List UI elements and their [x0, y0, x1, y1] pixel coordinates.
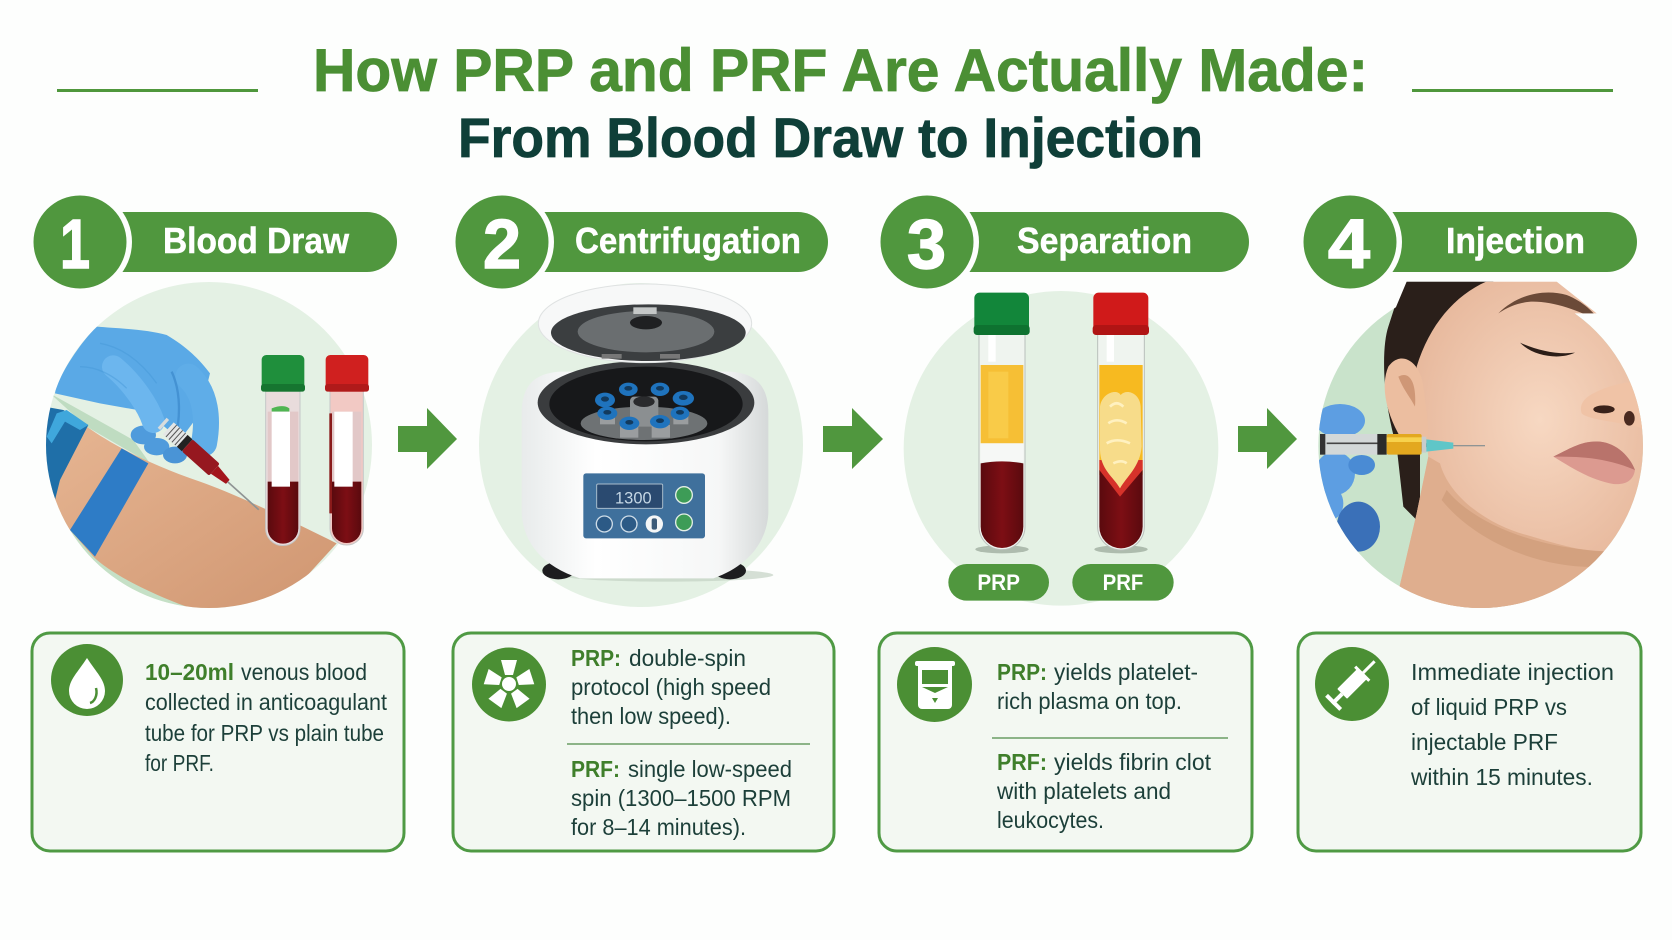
text block: PRF:	[571, 756, 620, 782]
text block: venous blood	[241, 659, 367, 685]
text block	[1410, 659, 1614, 790]
illustration: separated tubes	[904, 291, 1218, 606]
text block: yields platelet-	[1054, 659, 1198, 685]
tube green	[261, 355, 305, 545]
text block: protocol (high speed	[571, 674, 771, 700]
icon: syringe	[1315, 647, 1389, 721]
tube red	[325, 355, 369, 545]
syringe	[1320, 434, 1485, 455]
text block: within 15 minutes.	[1410, 764, 1593, 790]
text block	[145, 659, 388, 776]
arrow 2	[823, 408, 883, 469]
eyebrow	[1498, 292, 1594, 314]
skin	[1400, 282, 1643, 608]
PRP badge: PRP	[977, 570, 1020, 595]
rotor well	[538, 361, 754, 444]
closed eye	[1520, 343, 1575, 356]
PRF badge: PRF	[1103, 570, 1143, 595]
text block: for PRF.	[145, 750, 214, 776]
text block: single low-speed	[628, 756, 792, 782]
text block: PRP:	[571, 645, 621, 671]
step 3 header: Separation	[1017, 220, 1192, 261]
text block: tube for PRP vs plain tube	[145, 720, 384, 746]
text block: of liquid PRP vs	[1411, 694, 1567, 720]
PRP tube	[974, 293, 1030, 553]
lid	[538, 284, 752, 363]
text block: injectable PRF	[1411, 729, 1558, 755]
text block: yields fibrin clot	[1054, 749, 1212, 775]
step 3 header: 3	[907, 205, 946, 283]
step 1 header: 1	[60, 205, 90, 283]
text block: then low speed).	[571, 703, 731, 729]
card 1: blood draw	[32, 633, 404, 851]
step 1 header: Blood Draw	[163, 220, 350, 261]
card 2: centrifugation	[453, 633, 834, 851]
syringe	[157, 417, 264, 516]
title line 1: How PRP and PRF Are Actually Made:	[313, 37, 1368, 104]
text block: collected in anticoagulant	[145, 689, 388, 715]
arrow 1	[398, 408, 457, 469]
icon: centrifuge fan	[472, 648, 546, 722]
text block: rich plasma on top.	[997, 688, 1182, 714]
ear	[1385, 359, 1428, 443]
illustration: injection	[1315, 280, 1660, 613]
title line 2: From Blood Draw to Injection	[458, 106, 1203, 169]
hair	[1384, 280, 1493, 523]
text block: 10–20ml	[145, 659, 234, 685]
control panel: 1300	[615, 488, 652, 507]
text block: double-spin	[629, 645, 746, 671]
text block: with platelets and	[996, 778, 1171, 804]
step 4 header: 4	[1328, 205, 1370, 283]
illustration: centrifuge	[479, 283, 803, 607]
text block: for 8–14 minutes).	[571, 814, 746, 840]
card 3: separation	[879, 633, 1252, 851]
title	[57, 37, 1613, 169]
glove	[55, 327, 210, 463]
PRF badge	[1072, 564, 1174, 601]
text block: spin (1300–1500 RPM	[571, 785, 791, 811]
illustration: blood draw	[43, 282, 372, 620]
lips	[1553, 441, 1635, 484]
control panel	[583, 473, 705, 538]
icon: water drop	[51, 644, 123, 716]
step 2 header: Centrifugation	[575, 220, 801, 261]
step 4 header	[1298, 190, 1637, 294]
icon: beaker	[897, 647, 972, 722]
text block: PRP:	[997, 659, 1047, 685]
gloved hand	[1315, 404, 1380, 552]
step 2 header: 2	[483, 205, 521, 283]
arrow 3	[1238, 408, 1297, 469]
text block	[567, 645, 810, 840]
PRP badge	[948, 564, 1049, 601]
step 3 header	[875, 190, 1249, 294]
text block: Immediate injection	[1411, 659, 1614, 685]
step 4 header: Injection	[1446, 220, 1585, 261]
text block	[992, 659, 1228, 833]
nose	[1581, 382, 1643, 428]
step 1 header	[28, 190, 397, 294]
text block: PRF:	[997, 749, 1047, 775]
card 4: injection	[1298, 633, 1641, 851]
step 2 header	[450, 190, 828, 294]
text block: leukocytes.	[997, 807, 1104, 833]
PRF tube	[1093, 293, 1149, 553]
